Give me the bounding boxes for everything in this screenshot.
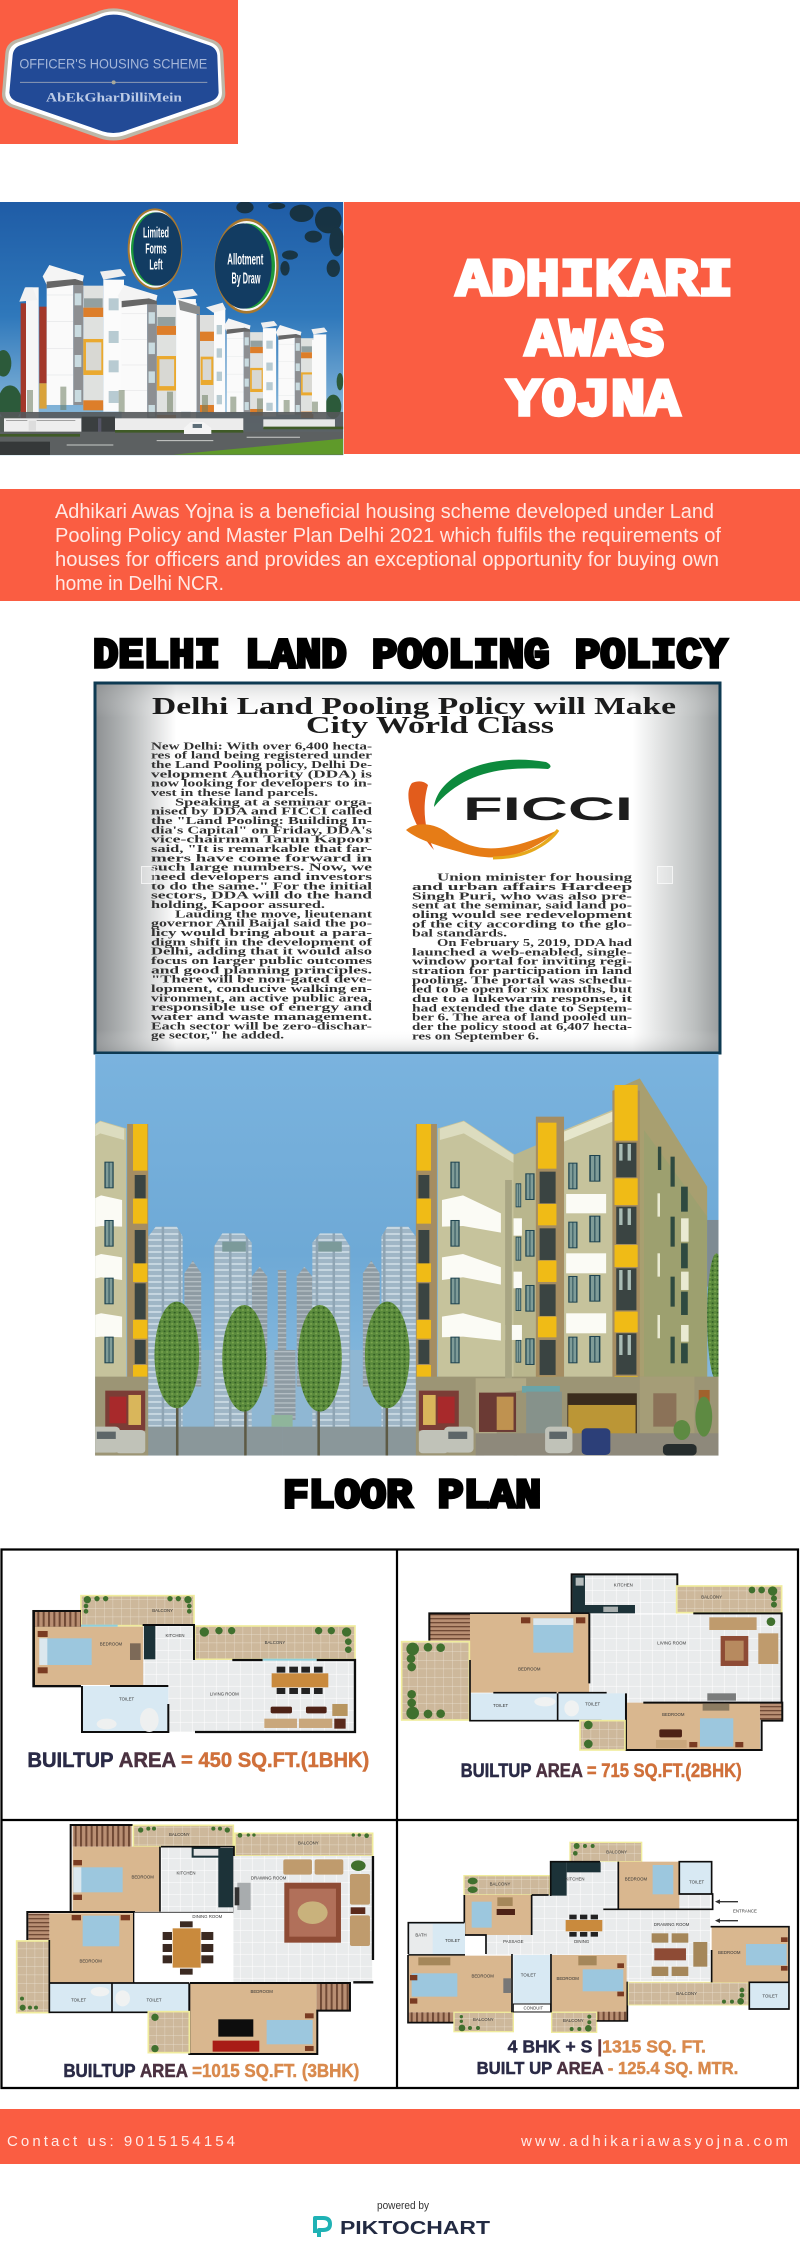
text: contact number: Contact us: 9015154154 [7,2133,235,2150]
text block: article left column: the Land Pooling policy, Delhi De- [151,760,373,771]
text: powered by: powered by [377,2200,429,2212]
text block: article right column: Union minister for housing [437,873,632,884]
text block: scheme description: Pooling Policy and Master Plan Delhi 2021 which fulfils the requirements of [55,525,721,547]
chart: 4BHK layout: BALCONY [606,1849,627,1854]
chart: 4BHK layout: BALCONY [473,2017,494,2022]
text block: article left column: such large numbers. Now, we [151,863,373,874]
image: mirrored building scene [46,1054,726,1456]
chart: 4BHK layout: TOILET [762,1993,778,1998]
chart: 1BHK layout: BEDROOM [100,1641,123,1646]
panel: contact footer [0,2109,800,2164]
text block: article left column: dia's Capital" on Friday, DDA's [151,825,372,836]
chart: 3BHK layout: BEDROOM [250,1989,273,1994]
chart: 3BHK layout: TOILET [146,1998,162,2003]
heading: adhikari awas yojna: YOJNA [507,371,680,431]
heading: newspaper headline: Delhi Land Pooling Policy will Make [152,694,676,720]
panel: floor plan 1BHK [2,1550,395,1818]
image: hero apartment building render [0,201,344,455]
text block: article left column: water and waste management. [151,1012,373,1023]
text block: article left column: New Delhi: With over 6,400 hecta- [151,741,373,752]
text block: article left column: vest in these land parcels. [151,788,319,799]
chart: 4BHK layout: BALCONY [490,1881,510,1886]
text block: article left column: nised by DDA and FICCI called [151,807,373,818]
text block: article left column: lopment, conducive walking en- [151,984,373,995]
text block: article left column: sectors, DDA will do the hand [151,891,373,902]
chart: 2BHK layout: TOILET [585,1702,601,1707]
text block: article right column: pooling. The portal was schedu- [412,975,633,986]
icon: slider arrow left [142,866,154,884]
icon: allotment by draw badge [215,218,279,314]
text block: article left column: said, "It is remarkable that far- [151,844,373,855]
text block: article left column: focus on larger public outcomes [151,956,372,967]
text block: article left column: licy would bring about a para- [151,928,373,939]
text: 4BHK area: BUILT UP AREA - 125.4 SQ. MTR. [477,2058,738,2078]
chart: 2BHK layout: KITCHEN [614,1583,633,1588]
text block: article left column: the "Land Pooling: Building In- [151,816,373,827]
chart: 3BHK layout [17,1825,373,2054]
icon: allotment by draw badge: Allotment [227,252,263,269]
chart: 4BHK layout: BEDROOM [556,1976,579,1981]
chart: 2BHK layout: BEDROOM [518,1667,541,1672]
text: 3BHK area: BUILTUP AREA =1015 SQ.FT. (3BHK) [63,2060,359,2081]
text block: article left column: holding, Kapoor assured. [151,900,326,911]
text block: article left column: to do the same." For the initial [151,881,372,892]
heading: delhi land pooling policy: DELHI LAND POOLING POLICY [93,632,728,680]
chart: 4BHK layout: TOILET [689,1879,705,1884]
text block: article left column: vice-chairman Tarun Kapoor [151,835,373,846]
text block: scheme description [55,501,721,595]
panel: description [0,489,800,601]
panel: logo block [0,0,238,144]
text: piktochart wordmark: PIKTOCHART [340,2218,490,2238]
text block: scheme description: Adhikari Awas Yojna is a beneficial housing scheme developed under Land [55,501,714,523]
chart: 3BHK layout: BALCONY [169,1832,190,1837]
text block: article right column: window portal for inviting regi- [412,957,633,968]
chart: 4BHK layout: CONDUIT [523,2005,544,2010]
chart: 2BHK layout: BEDROOM [662,1712,685,1717]
text block: article left column: res of land being registered under [151,751,373,762]
text block: article right column: launched a web-enabled, single- [412,947,633,958]
text block: article right column: bal standards. [412,929,508,940]
chart: 1BHK layout: BALCONY [152,1608,173,1613]
chart: 3BHK layout: DRAWING ROOM [251,1875,287,1880]
icon: piktochart logo [315,2218,490,2238]
chart: 4BHK layout: BEDROOM [718,1950,741,1955]
chart: 1BHK layout: BALCONY [265,1640,285,1645]
chart: 3BHK layout: TOILET [71,1998,87,2003]
text block: article left column: and good planning principles. [151,965,373,976]
chart: 4BHK layout: DINING [574,1939,590,1944]
text block: article left column: mers have come forward in [151,853,373,864]
chart: 2BHK layout: BALCONY [701,1594,722,1599]
text block: article right column: of the city according to the glo- [412,919,633,930]
text block: article right column: On February 5, 2019, DDA had [437,938,632,949]
chart: 4BHK layout: BALCONY [563,2018,584,2023]
text block: article right column: der the policy stood at 6,407 hecta- [412,1022,633,1033]
text block: article left column: responsible use of energy and [151,1003,373,1014]
panel: newspaper clipping [95,683,720,1053]
icon: slider arrow right [658,866,672,884]
icon: FICCI logo: FICCI [463,791,633,827]
icon: limited forms badge: Left [149,257,163,273]
text: 1BHK area: BUILTUP AREA = 450 SQ.FT.(1BHK) [27,1748,369,1772]
heading: adhikari awas yojna: ADHIKARI [456,251,733,311]
text block: article right column: res on September 6. [412,1031,540,1042]
text block: article left column: Speaking at a seminar orga- [175,797,373,808]
chart: 1BHK layout: TOILET [119,1697,135,1702]
panel: floor plan 3BHK [17,1825,373,2081]
icon: hexagon logo badge: AbEkGharDilliMein [46,90,183,105]
icon: allotment by draw badge: By Draw [231,270,261,287]
heading: newspaper headline [152,694,676,739]
chart: 3BHK layout: BEDROOM [79,1959,102,1964]
text block: article right column: sent at the seminar, said land po- [412,901,633,912]
text: 4BHK area [477,2037,738,2078]
text block: article left column: governor Anil Baijal said the po- [151,919,373,930]
text block: article left column: Lauding the move, lieutenant [175,909,373,920]
heading: newspaper headline: City World Class [306,713,554,739]
text block: article right column: and urban affairs Hardeep [412,882,633,893]
chart: 3BHK layout: BEDROOM [131,1874,154,1879]
panel: floor plan 4BHK [408,1842,789,2078]
icon: limited forms badge: Forms [145,241,167,257]
chart: 4BHK layout: DRAWING ROOM [654,1922,690,1927]
chart: 1BHK layout: KITCHEN [165,1633,184,1638]
text: website: www.adhikariawasyojna.com [520,2133,788,2150]
icon: hexagon logo badge: OFFICER'S HOUSING SCHEME [19,56,207,72]
icon: limited forms badge [128,208,182,290]
chart: 3BHK layout: KITCHEN [176,1870,195,1875]
text block: article right column: stration for participation in land [412,966,633,977]
chart: 1BHK layout [32,1596,355,1732]
chart: 4BHK layout: TOILET [445,1938,461,1943]
heading: adhikari awas yojna: AWAS [525,311,664,371]
text block: article right column: ber 6. The area of land pooled un- [412,1013,633,1024]
icon: limited forms badge: Limited [143,225,169,241]
text block: article left column: digm shift in the development of [151,937,373,948]
chart: 1BHK layout: LIVING ROOM [210,1691,239,1696]
heading: adhikari awas yojna [456,251,733,431]
icon: hexagon logo badge [2,8,225,140]
chart: 4BHK layout: BATH [415,1933,427,1938]
icon: FICCI logo [406,760,633,858]
chart: 4BHK layout: KITCHEN [565,1877,584,1882]
text block: article left column: Delhi, adding that it would also [151,947,372,958]
chart: 4BHK layout [408,1842,789,2032]
chart: 4BHK layout: BEDROOM [471,1974,494,1979]
chart: 2BHK layout: TOILET [493,1703,509,1708]
text block: article right column: led to be open for six months, but [412,985,633,996]
text block: article left column: need developers and investors [151,872,372,883]
chart: 4BHK layout: ENTRANCE [733,1908,757,1913]
panel: floor plan 2BHK [402,1574,782,1782]
text block: article right column: oling would see redevelopment [412,910,633,921]
chart: 2BHK layout: LIVING ROOM [657,1641,686,1646]
text block: article left column: "There will be non-gated deve- [151,975,373,986]
chart: 4BHK layout: PASSAGE [503,1939,524,1944]
text: 4BHK area: 4 BHK + S |1315 SQ. FT. [508,2037,706,2057]
text block: article left column: now looking for developers to in- [151,779,373,790]
text block: article left column: ge sector," he added. [151,1031,285,1042]
floor plan grid lines [2,1550,798,2088]
chart: 4BHK layout: TOILET [521,1973,536,1978]
text block: article right column: had extended the date to Septem- [412,1003,633,1014]
chart: 3BHK layout: BALCONY [298,1841,319,1846]
text block: article left column: vironment, an active public area, [151,993,373,1004]
icon: entrance arrows [715,1899,738,1923]
chart: 2BHK layout [402,1574,782,1750]
chart: 3BHK layout: DINING ROOM [192,1914,223,1919]
chart: 4BHK layout: BEDROOM [625,1877,648,1882]
panel: title [344,202,800,454]
text: 2BHK area: BUILTUP AREA = 715 SQ.FT.(2BHK) [461,1761,742,1782]
text block: article left column: Each sector will be zero-dischar- [151,1021,373,1032]
text block: article right column: Singh Puri, who was also pre- [412,891,633,902]
text block: scheme description: home in Delhi NCR. [55,573,224,595]
chart: 4BHK layout: BALCONY [676,1991,697,1996]
text block: article right column: due to a lukewarm response, it [412,994,633,1005]
text block: article right column [412,873,633,1042]
heading: floor plan: FLOOR PLAN [283,1474,541,1520]
text block: article left column: velopment Authority (DDA) is [151,769,372,780]
text block: scheme description: houses for officers and provides an exceptional opportunity for buying own [55,549,719,571]
text block: article left column [151,741,373,1042]
